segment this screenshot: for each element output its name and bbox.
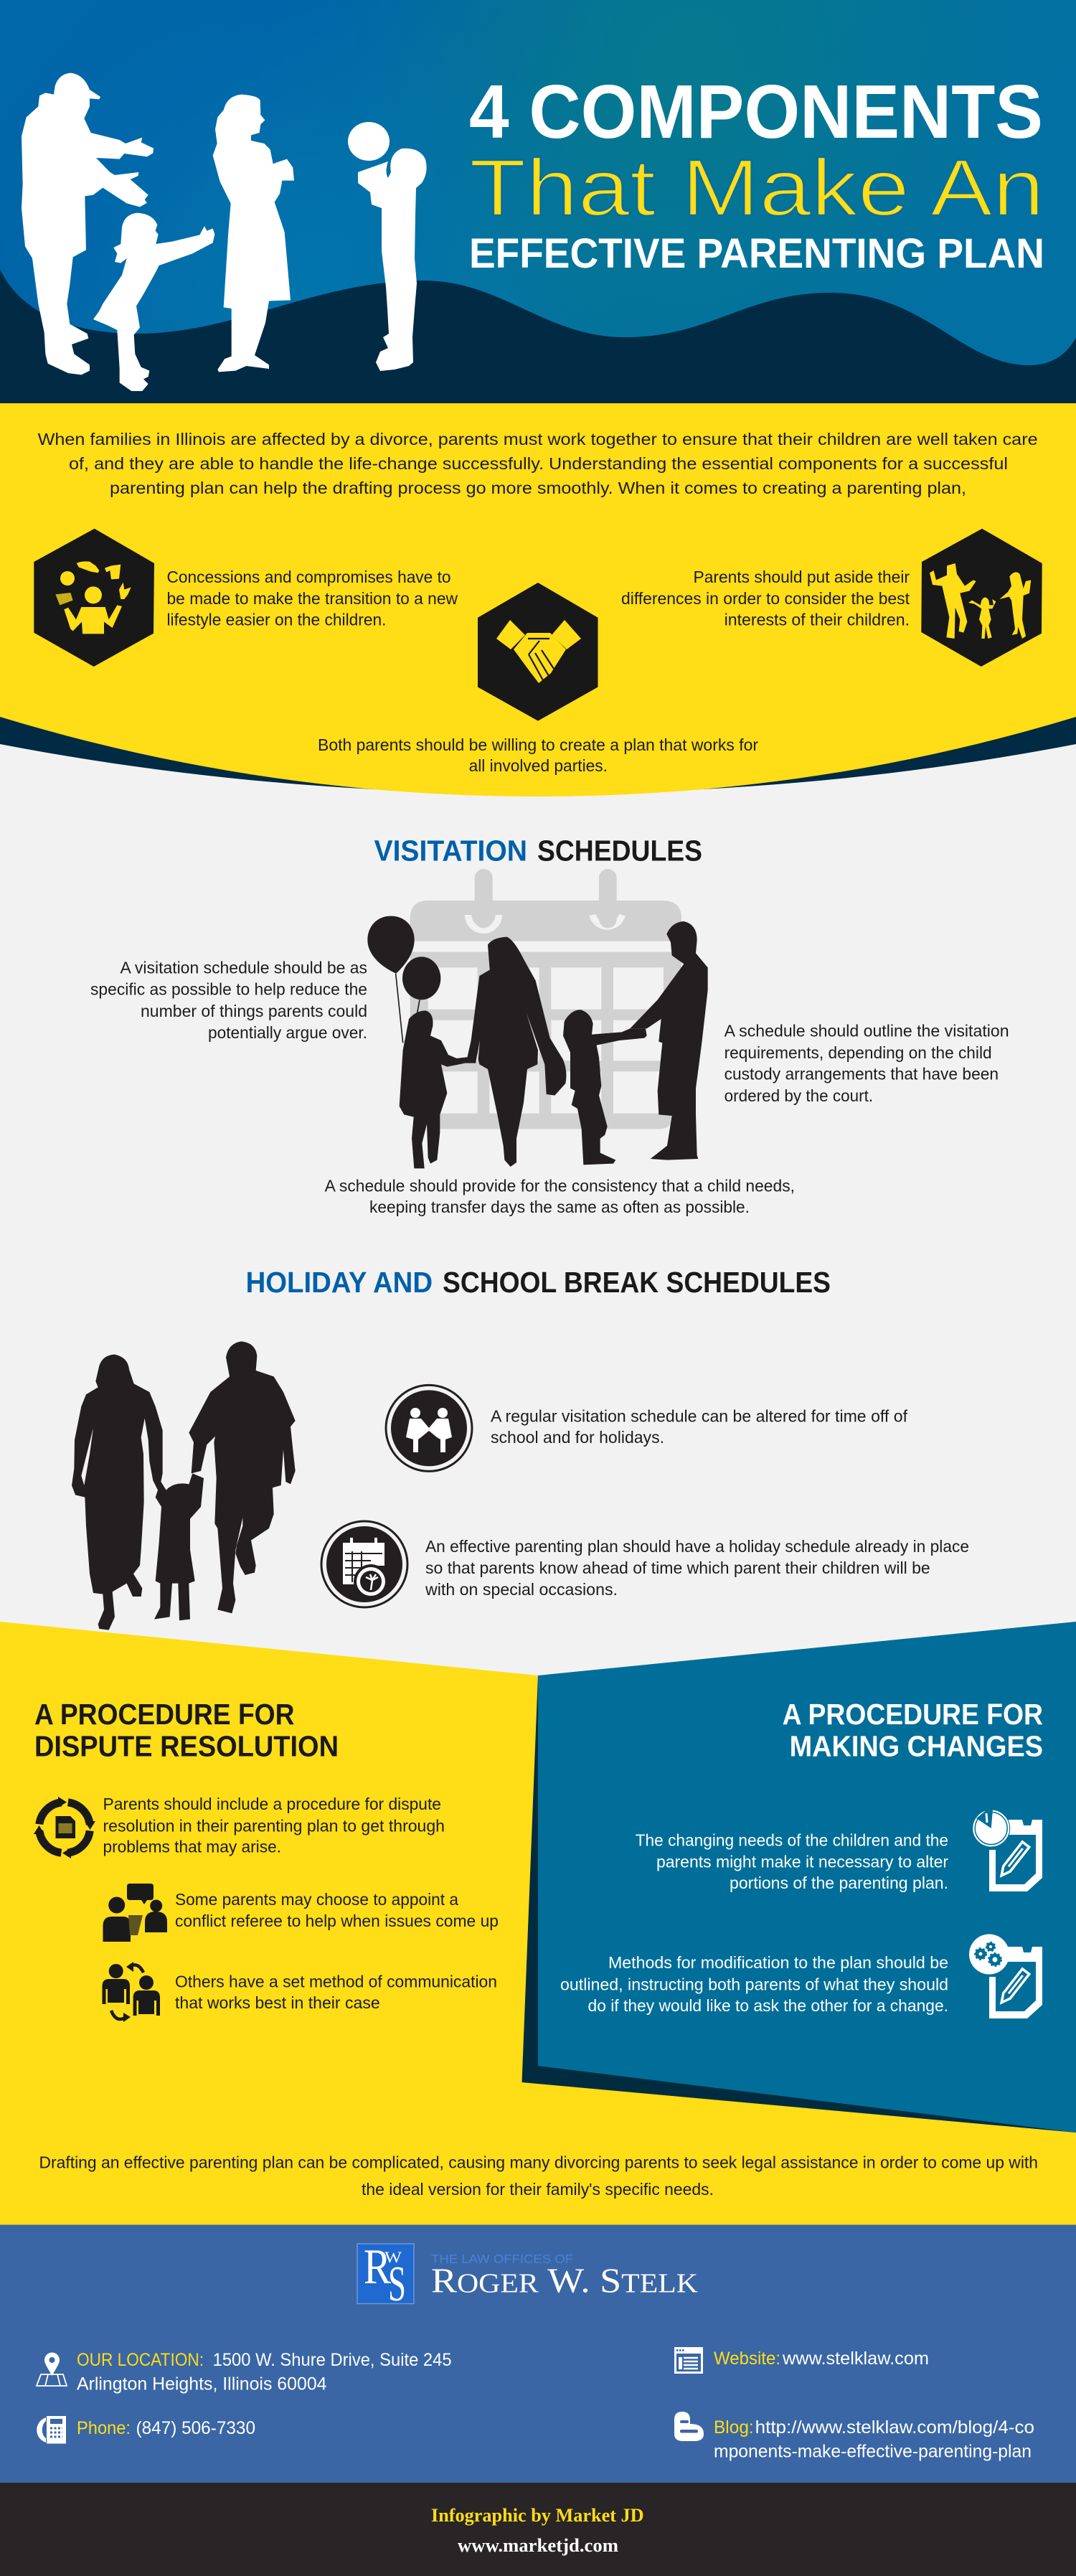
text: blog: Blog: (714, 2417, 754, 2438)
logo: ROGER W. S TELK (431, 2260, 699, 2300)
panel: contact footer (0, 2224, 1076, 2483)
icon: website (674, 2347, 703, 2374)
text: visitation right (725, 1022, 1009, 1105)
text: phone: (847) 506-7330 (136, 2418, 255, 2438)
text: visitation right: A schedule should outline the visitation (725, 1022, 1009, 1040)
text: visitation left: specific as possible to help reduce the (90, 980, 367, 999)
heading: holiday and school break schedules: SCHOOL BREAK SCHEDULES (443, 1266, 831, 1299)
heading: making changes: A PROCEDURE FOR (783, 1698, 1043, 1731)
text: blog: http://www.stelklaw.com/blog/4-co (755, 2417, 1034, 2438)
text: visitation bottom (325, 1176, 795, 1216)
icon: two children circle (386, 1385, 472, 1471)
title: EFFECTIVE PARENTING PLAN (469, 230, 1044, 277)
heading: making changes (783, 1698, 1043, 1763)
text: closing paragraph: the ideal version for their family's specific needs. (362, 2180, 714, 2199)
text: dispute procedure: resolution in their parenting plan to get through (103, 1817, 445, 1835)
text: put aside differences: differences in order to consider the best (621, 589, 910, 608)
text: methods for modification: outlined, instructing both parents of what they should (560, 1975, 948, 1993)
text: location (77, 2350, 452, 2394)
logo: W (384, 2248, 402, 2266)
heading: visitation schedules (374, 835, 702, 868)
text: visitation right: ordered by the court. (725, 1086, 873, 1105)
text: both parents: Both parents should be willing to create a plan that works for (318, 735, 758, 754)
title: 4 COMPONENTS (469, 70, 1043, 154)
text: concessions: be made to make the transition to a new (166, 589, 458, 608)
text: website (714, 2349, 929, 2369)
icon: clock and clipboard (973, 1810, 1042, 1891)
text: visitation left: A visitation schedule should be as (121, 959, 367, 977)
text: visitation right: custody arrangements that have been (725, 1065, 999, 1083)
heading: visitation schedules: SCHEDULES (537, 835, 702, 868)
logo (357, 2239, 699, 2312)
text: dispute procedure (103, 1795, 445, 1856)
text: holiday schedule: with on special occasions. (425, 1580, 618, 1599)
text: conflict referee: conflict referee to help when issues come up (175, 1912, 499, 1930)
heading: dispute resolution (34, 1698, 339, 1763)
text: regular visitation: school and for holidays. (491, 1428, 664, 1447)
credit url: www.marketjd.com (458, 2535, 618, 2556)
icon: gears and clipboard (969, 1935, 1042, 2018)
icon: juggling hexagon (34, 529, 154, 667)
intro paragraph (38, 430, 1038, 497)
text: visitation bottom: keeping transfer days the same as often as possible. (369, 1198, 750, 1216)
text: holiday schedule (425, 1537, 969, 1599)
text: closing paragraph: Drafting an effective parenting plan can be complicated, causing many divorcing parents to seek legal assistance in order to come up with (39, 2153, 1038, 2172)
heading: making changes: MAKING CHANGES (790, 1730, 1043, 1763)
heading: visitation schedules: VISITATION (374, 835, 527, 868)
text: dispute procedure: Parents should include a procedure for dispute (103, 1795, 441, 1813)
text: blog (714, 2417, 1034, 2461)
text: dispute procedure: problems that may arise. (103, 1837, 281, 1856)
text: visitation left: potentially argue over. (208, 1023, 367, 1042)
icon: set method of communication (102, 1962, 160, 2022)
text: both parents (318, 735, 758, 775)
intro paragraph: of, and they are able to handle the life-change successfully. Understanding the essential components for a successful (69, 454, 1008, 473)
text: website: Website: (714, 2349, 780, 2369)
panel: header (0, 0, 1076, 404)
text: phone: Phone: (77, 2418, 131, 2438)
calendar (410, 869, 681, 1129)
icon: holiday calendar circle (321, 1521, 407, 1607)
text: both parents: all involved parties. (469, 756, 608, 775)
text: set method: Others have a set method of communication (175, 1972, 497, 1990)
panel: dispute resolution (0, 1622, 1076, 2225)
panel: intro yellow (0, 403, 1076, 796)
text: put aside differences: interests of their children. (725, 610, 910, 629)
text: closing paragraph (39, 2153, 1038, 2199)
text: concessions (166, 568, 458, 629)
text: visitation left: number of things parents could (141, 1002, 367, 1020)
illustration: walking family (72, 1341, 296, 1630)
icon: handshake hexagon (478, 583, 598, 721)
text: conflict referee (175, 1890, 499, 1930)
title: That Make An (469, 143, 1044, 232)
text: visitation left (90, 959, 367, 1042)
text: visitation right: requirements, depending on the child (725, 1043, 992, 1062)
panel: credits footer (0, 2483, 1076, 2576)
text: location: OUR LOCATION: (77, 2350, 204, 2370)
text: methods for modification (560, 1953, 948, 2015)
logo: R (364, 2239, 391, 2295)
text: holiday schedule: so that parents know ahead of time which parent their children will be (425, 1559, 930, 1577)
family silhouette (367, 916, 708, 1168)
icon: family dancing hexagon (921, 529, 1042, 667)
text: put aside differences (621, 568, 910, 629)
heading: holiday and school break schedules: HOLIDAY AND (246, 1266, 433, 1299)
icon: conflict referee (103, 1884, 167, 1942)
text: concessions: Concessions and compromises have to (166, 568, 450, 586)
text: regular visitation (491, 1406, 908, 1447)
illustration: calendar and family (367, 869, 708, 1168)
text: changing needs: The changing needs of the children and the (636, 1831, 948, 1850)
dark wave (0, 269, 1076, 404)
logo: S (388, 2257, 406, 2312)
panel: making changes (522, 1622, 1076, 2133)
icon: blog (674, 2412, 704, 2441)
text: methods for modification: do if they would like to ask the other for a change. (588, 1996, 948, 2015)
text: location: 1500 W. Shure Drive, Suite 245 (213, 2350, 452, 2370)
logo: THE LAW OFFICES OF (431, 2252, 573, 2266)
text: concessions: lifestyle easier on the children. (166, 610, 386, 629)
intro paragraph: When families in Illinois are affected by a divorce, parents must work together to ensure that their children are well taken care (38, 430, 1038, 448)
icon: location pin (37, 2352, 67, 2386)
text: blog: mponents-make-effective-parenting-plan (714, 2441, 1032, 2461)
heading: dispute resolution: DISPUTE RESOLUTION (34, 1730, 339, 1763)
text: changing needs: parents might make it necessary to alter (656, 1853, 948, 1871)
text: location: Arlington Heights, Illinois 60004 (77, 2374, 327, 2394)
icon: phone (37, 2416, 66, 2444)
intro paragraph: parenting plan can help the drafting process go more smoothly. When it comes to creating a parenting plan, (110, 479, 966, 497)
text: set method (175, 1972, 497, 2012)
text: conflict referee: Some parents may choose to appoint a (175, 1890, 458, 1909)
heading: dispute resolution: A PROCEDURE FOR (34, 1698, 294, 1731)
navy curve under intro panel (0, 710, 1076, 794)
text: put aside differences: Parents should put aside their (693, 568, 910, 586)
icon: circular arrows document (34, 1797, 95, 1858)
illustration: family white silhouettes (22, 73, 427, 391)
text: holiday schedule: An effective parenting plan should have a holiday schedule already in place (425, 1537, 969, 1556)
text: set method: that works best in their case (175, 1993, 380, 2012)
credit text: Infographic by Market JD (431, 2505, 644, 2526)
text: changing needs (636, 1831, 948, 1892)
text: methods for modification: Methods for modification to the plan should be (608, 1953, 948, 1972)
text: changing needs: portions of the parenting plan. (730, 1874, 948, 1892)
heading: holiday and school break schedules (246, 1266, 831, 1299)
text: website: www.stelklaw.com (782, 2349, 929, 2369)
title (469, 70, 1044, 277)
text: visitation bottom: A schedule should provide for the consistency that a child needs, (325, 1176, 795, 1195)
text: phone (77, 2418, 255, 2438)
text: regular visitation: A regular visitation schedule can be altered for time off of (491, 1406, 908, 1425)
